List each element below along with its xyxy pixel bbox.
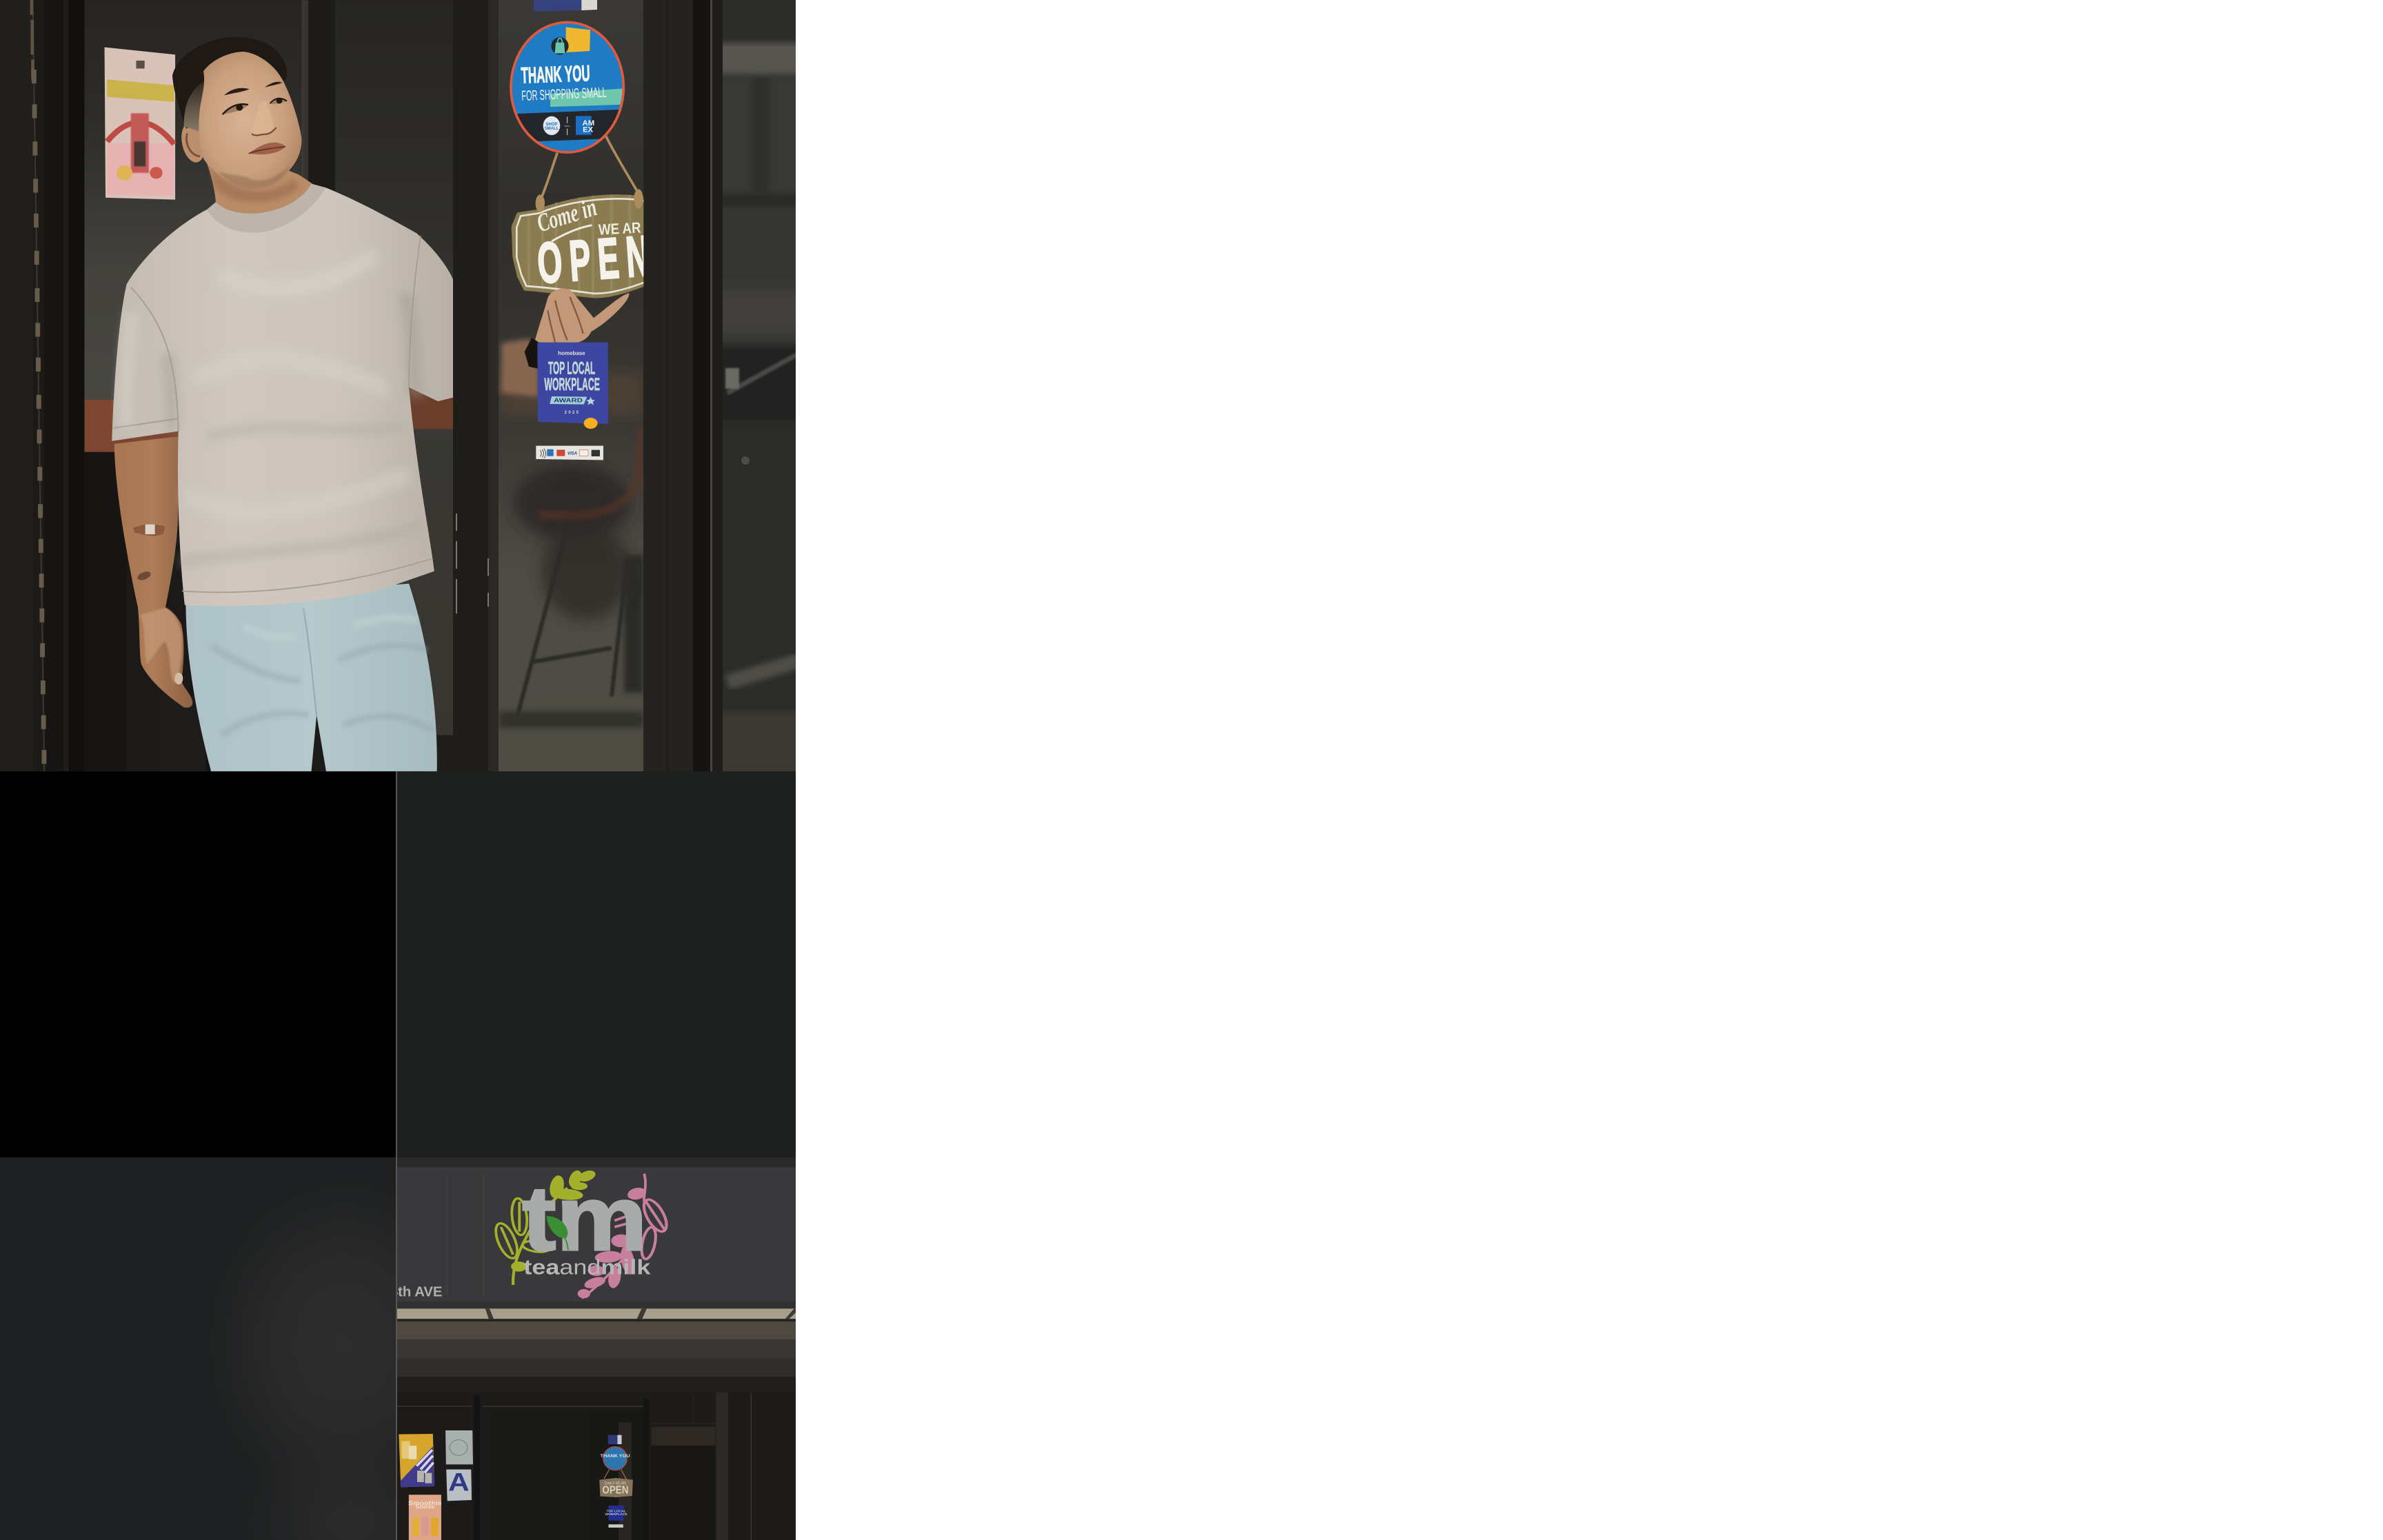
badge: homebase top local workplace award 2025: TOP LOCAL [548,360,595,378]
door glass reflections [499,0,643,771]
badge: homebase top local workplace award 2025 [537,343,608,424]
poster: smoothie soiree: Smoothie [408,1500,442,1507]
badge: thank you for shopping small: WITH [565,125,570,128]
divider line [396,771,397,1540]
icon: green inner leaf [546,1216,568,1250]
badges: top local workplace and card stickers [536,343,608,460]
icon: trousers [185,584,437,771]
signs on the door glass [510,0,644,298]
icon: door stickers miniature: TOP LOCAL [606,1510,626,1512]
icon: door stickers miniature [599,1435,633,1528]
icon: head and neck [172,37,319,224]
poster: smoothie soiree [408,1495,442,1540]
background: wall and door frames [0,0,796,771]
icon: door stickers miniature: OPEN [602,1485,628,1496]
badge: homebase top local workplace award 2025: WORKPLACE [544,376,600,394]
badge: thank you for shopping small [505,22,630,152]
sign: come in we are open [512,194,644,298]
awning bands [397,1321,796,1392]
panel: dark grey tile [397,771,796,1157]
badge: thank you for shopping small: THANK YOU [521,60,590,88]
badge: homebase top local workplace award 2025: 2025 [565,411,580,415]
sign: come in we are open: OPEN [535,223,658,296]
notice: grey permit [445,1430,473,1464]
icon: rope knots [536,189,643,212]
panel: tea and milk storefront [397,1157,796,1540]
badge: thank you for shopping small: AM [583,119,594,128]
notice: health grade A: A [448,1468,470,1497]
sticker: payment cards [536,446,603,460]
badge: thank you for shopping small: SMALL [545,127,559,131]
poster: smoothie soiree: Soiree [415,1503,435,1510]
icon: top sticker fragment [534,0,597,12]
rope [540,136,639,201]
icon: hand holding the sign [525,288,629,369]
storefront sign and logo [390,1157,802,1346]
badge: thank you for shopping small: FOR SHOPPING SMALL [521,85,607,104]
door frame and shop glass [453,0,807,780]
poster on back wall [105,47,175,200]
poster: yellow drinks [399,1434,434,1487]
badge: homebase top local workplace award 2025: homebase [558,350,585,356]
icon: left forearm and hand with bandage [114,436,192,708]
sign: come in we are open: WE AR [598,219,641,239]
icon: door stickers miniature: WORKPLACE [605,1512,627,1516]
icon: orange light reflection [584,418,598,429]
sticker: payment cards: VISA [567,452,577,456]
panel: dark grey tile with soft glow [0,1157,396,1540]
icon: t-shirt [112,184,454,606]
light strip under the sign [393,1308,802,1319]
logo wordmark: teaandmilk [523,1255,651,1279]
icon: pink leaves [578,1174,671,1298]
icon: door stickers miniature: Come in WE ARE [604,1481,627,1486]
right window reflections [723,40,796,771]
sign: come in we are open: Come in [534,193,600,238]
panel: black tile [0,771,396,1157]
icon: reflected arm [501,338,539,397]
badge: thank you for shopping small: EX [583,125,594,134]
icon: door stickers miniature: THANK YOU [601,1454,630,1459]
badge: homebase top local workplace award 2025: AWARD [554,397,583,404]
figure: man in t-shirt and light blue trousers [112,37,454,771]
icon: green leaves [492,1168,597,1285]
panel: hero photo of shop owner at the door [0,0,796,771]
logo: tm monogram: tm [522,1168,647,1270]
shopfront with posters and door stickers [393,1392,802,1540]
badge: thank you for shopping small: SHOP [546,123,557,127]
